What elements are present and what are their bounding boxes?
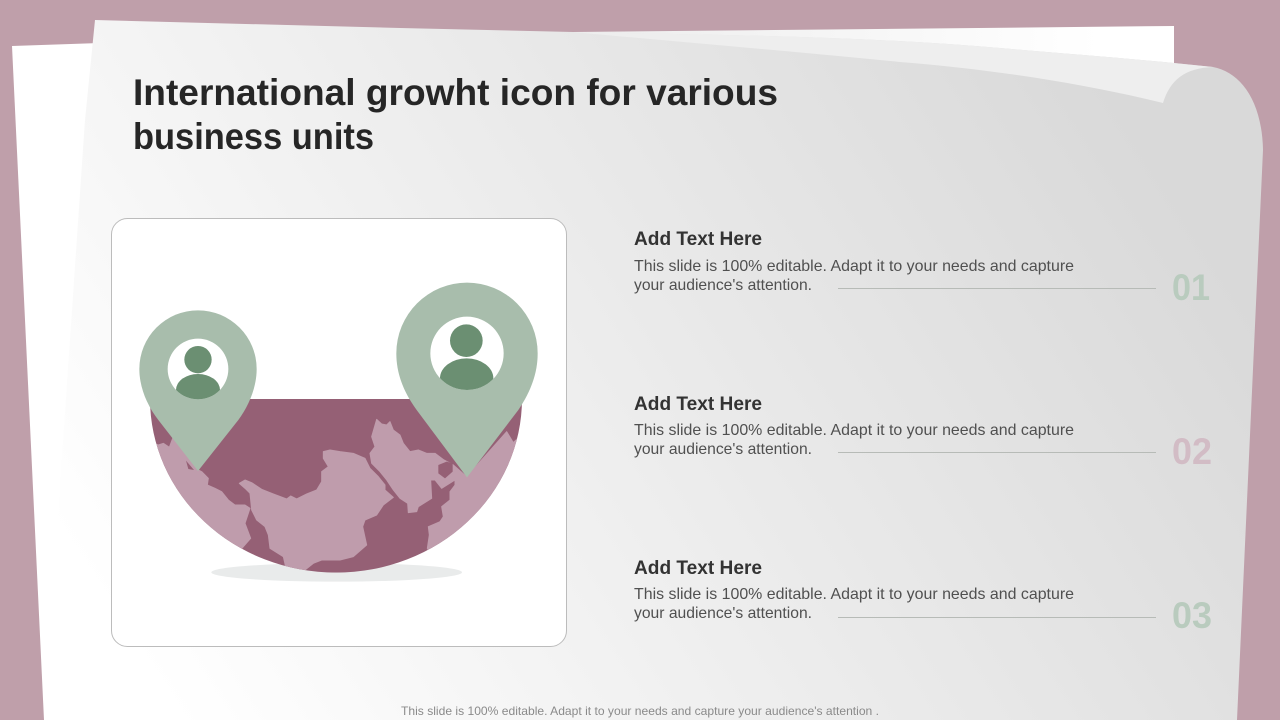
body text 02: your audience's attention.	[634, 441, 812, 458]
number 01: 01	[1172, 267, 1210, 308]
title: business units	[133, 116, 374, 157]
globe shadow	[211, 563, 462, 582]
title: International growht icon for various	[133, 72, 778, 113]
divider 03	[838, 616, 1156, 618]
footer note: This slide is 100% editable. Adapt it to your needs and capture your audience's attention .	[401, 704, 879, 718]
icon: right pin	[396, 283, 538, 477]
heading 03: Add Text Here	[634, 558, 762, 579]
body text 01: This slide is 100% editable. Adapt it to your needs and capture	[634, 258, 1074, 275]
paper: back top sheet	[573, 26, 1174, 75]
divider 01	[838, 288, 1156, 290]
item 02	[634, 394, 1212, 472]
item 01	[634, 229, 1210, 308]
panel: illustration card	[112, 218, 566, 646]
half globe	[143, 399, 530, 576]
body text 03: your audience's attention.	[634, 605, 812, 622]
number 03: 03	[1172, 595, 1212, 636]
body text 03	[634, 586, 1074, 622]
paper: corner curl	[573, 32, 1213, 103]
body text 02: This slide is 100% editable. Adapt it to your needs and capture	[634, 422, 1074, 439]
icon: left pin	[139, 310, 257, 471]
paper: back left sheet	[12, 43, 100, 720]
number 02: 02	[1172, 431, 1212, 472]
body text 01	[634, 258, 1074, 294]
title	[133, 72, 778, 157]
divider 02	[838, 452, 1156, 454]
body text 02	[634, 422, 1074, 458]
item 03	[634, 558, 1212, 636]
heading 01: Add Text Here	[634, 229, 762, 250]
icon: globe with location pins	[139, 283, 538, 582]
body text 03: This slide is 100% editable. Adapt it to your needs and capture	[634, 586, 1074, 603]
heading 02: Add Text Here	[634, 394, 762, 415]
body text 01: your audience's attention.	[634, 277, 812, 294]
